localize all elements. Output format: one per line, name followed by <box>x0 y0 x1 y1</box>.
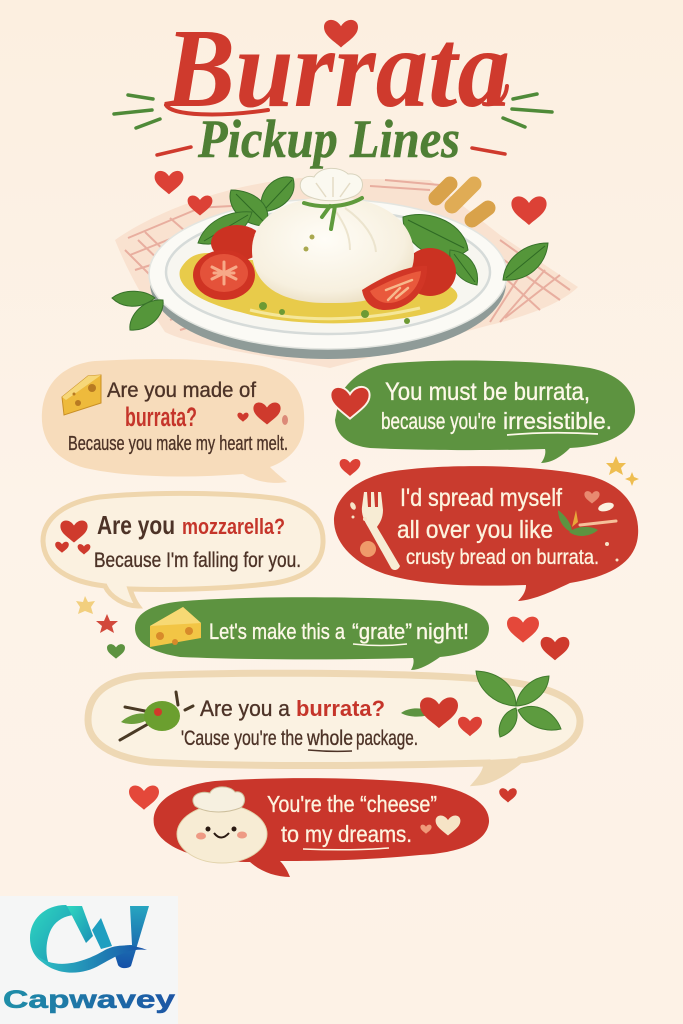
icon: fork <box>362 492 400 570</box>
title <box>114 7 552 169</box>
bubble 6: whole package: package. <box>356 727 418 750</box>
bubble 3: Are you mozzarella: mozzarella? <box>182 514 285 539</box>
basil leaves on plate <box>198 177 478 285</box>
decorations left of bubble 5 <box>76 596 125 659</box>
bubble 4: I'd spread myself: crusty bread on burrata. <box>406 546 599 569</box>
bubble 1: Are you made of burrata: burrata? <box>125 402 197 432</box>
sprinkles <box>349 501 618 562</box>
loose basil right <box>503 243 548 280</box>
bubble 3: Are you mozzarella <box>43 493 323 606</box>
icon: green heart <box>107 644 125 659</box>
text: You must be burrata, <box>385 378 590 406</box>
bubble 2: You must be burrata <box>330 361 635 463</box>
icon: title heart <box>324 20 358 47</box>
bubble 4: I'd spread myself: all over you like <box>397 516 553 544</box>
bubble 7: cheese to my dreams: to <box>281 821 299 847</box>
illustration hearts <box>155 171 547 225</box>
breadsticks <box>436 184 488 220</box>
bubble 5: grate night: night! <box>416 619 469 644</box>
loose basil left <box>112 291 163 330</box>
bubble 7: cheese to my dreams <box>154 778 489 877</box>
icon: heart <box>330 387 370 419</box>
icon: stars <box>606 456 639 486</box>
title swooshes <box>114 94 552 155</box>
tomatoes <box>193 225 456 300</box>
bubble 5: grate night <box>135 597 489 670</box>
logo: Capwavey <box>0 896 178 1024</box>
text: You're the “cheese” <box>267 791 437 817</box>
napkin <box>115 178 578 368</box>
icon: cheese <box>150 607 201 647</box>
bubble 2: You must be burrata: irresistible. <box>503 408 612 434</box>
text: Are you made of <box>107 379 256 402</box>
olive oil <box>180 253 457 324</box>
illustration: burrata plate <box>112 168 578 368</box>
icon: cheese <box>62 375 101 415</box>
bubble 2: You must be burrata: because you're <box>381 408 496 434</box>
icon: red star <box>96 614 118 633</box>
bubble 4: I'd spread myself <box>334 466 638 601</box>
icon: left heart <box>129 785 159 810</box>
bubble 6: whole package <box>88 671 580 782</box>
logo mark <box>30 905 149 973</box>
bubble 7: cheese to my dreams: my dreams. <box>305 821 412 847</box>
bubble 1: Are you made of burrata <box>42 359 304 483</box>
tomato dot <box>360 541 376 557</box>
burrata <box>252 168 414 303</box>
bubble 6: whole package: 'Cause you're the <box>181 727 303 750</box>
title: Burrata: Burrata <box>163 7 510 131</box>
bubble 3: Are you mozzarella: Because I'm falling for you. <box>94 549 301 572</box>
logo wordmark: Capwavey <box>3 986 175 1014</box>
tomato wedge <box>362 266 427 310</box>
icon: olive <box>120 692 193 740</box>
title flourish <box>166 86 507 114</box>
bubble 6: whole package: burrata? <box>296 696 385 721</box>
text: Are you a <box>200 696 291 721</box>
icon: small heart <box>340 459 360 476</box>
bubble 5: grate night: “grate” <box>352 619 412 644</box>
bubble 6: whole package: whole <box>306 727 353 750</box>
text: Are you <box>97 510 175 540</box>
bubble 1: Are you made of burrata: Because you make my heart melt. <box>68 433 288 455</box>
text: I'd spread myself <box>400 484 562 512</box>
icon: basil <box>476 671 561 737</box>
icon: yellow star <box>76 596 95 614</box>
plate <box>149 199 507 359</box>
icon: burrata character <box>177 787 267 863</box>
icon: hearts <box>237 403 288 425</box>
icon: right hearts <box>507 617 569 660</box>
icon: basil sprig <box>558 491 616 536</box>
icon: hearts <box>420 815 460 836</box>
title: Pickup Lines: Pickup Lines <box>197 109 460 169</box>
icon: right heart <box>499 788 517 802</box>
icon: hearts and leaf <box>401 697 482 736</box>
icon: hearts <box>55 521 90 554</box>
text: Let's make this a <box>209 619 346 644</box>
